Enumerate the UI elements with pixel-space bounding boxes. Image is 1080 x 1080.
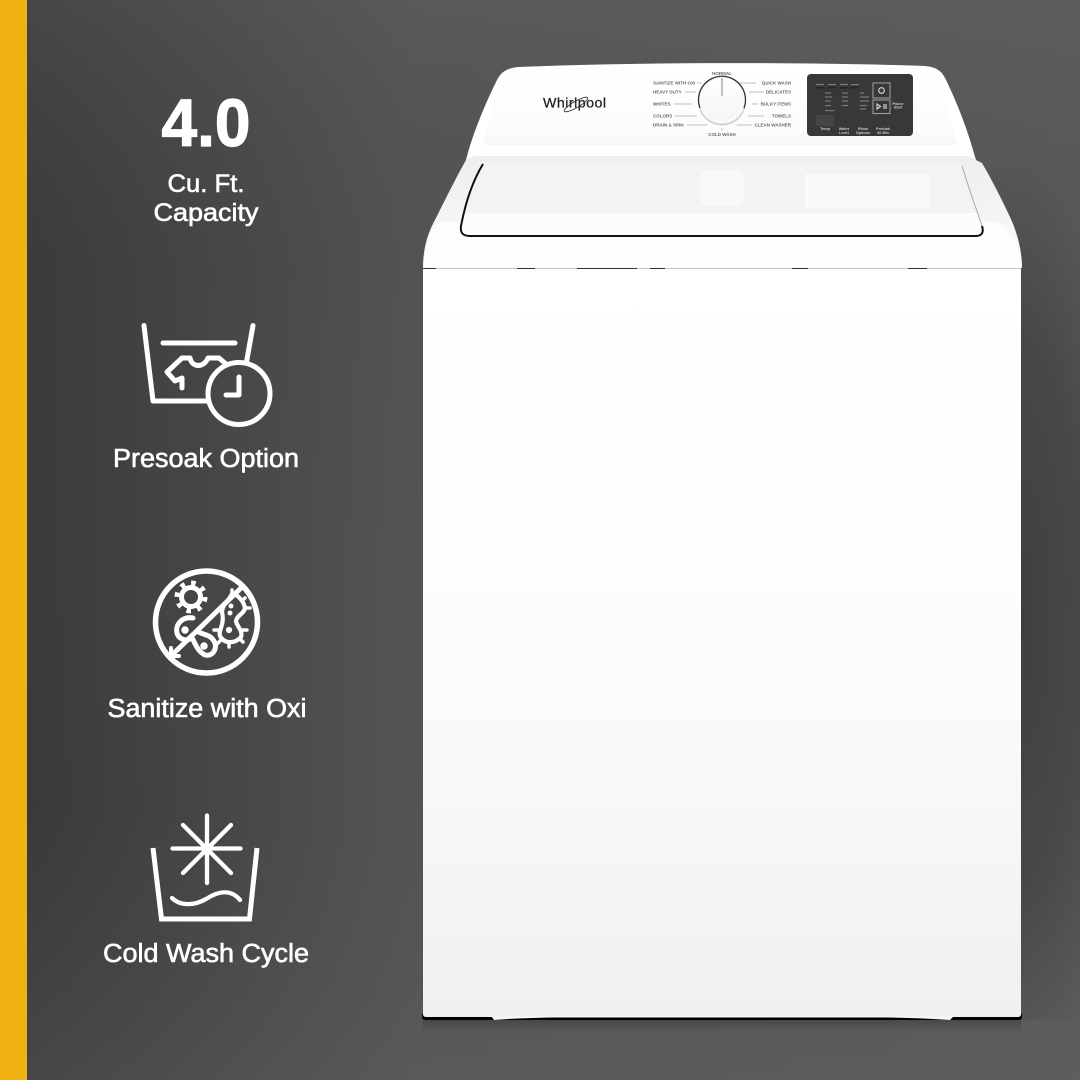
washer cabinet: [423, 268, 1021, 1017]
control panel: [807, 74, 913, 136]
console recessed face: [483, 66, 957, 145]
cycle labels: TOWELS: [772, 114, 791, 118]
panel labels: Pause: [892, 102, 904, 106]
floor shadow: [423, 1020, 1021, 1032]
panel labels: Options: [856, 131, 870, 135]
washer base edge: [422, 1012, 1022, 1020]
panel labels: Level: [839, 131, 849, 135]
panel labels: Prefoak: [876, 127, 891, 131]
sanitize label: Sanitize with Oxi: [108, 695, 306, 723]
lid front block: [424, 222, 1021, 268]
washer console: [466, 63, 976, 160]
cold wash label: Cold Wash Cycle: [103, 940, 309, 968]
brand logo: Whirlpool: [543, 96, 606, 112]
cycle labels: QUICK WASH: [762, 80, 791, 86]
washing machine: [422, 63, 1022, 1032]
icon: tub with shirt and clock: [144, 326, 270, 424]
washer shoulders: [423, 156, 1022, 268]
capacity label: Cu. Ft.: [168, 170, 244, 198]
panel labels: Rinse: [858, 127, 868, 131]
feature: cold wash cycle: [103, 816, 309, 968]
foot highlight: [491, 1016, 954, 1020]
cycle labels: CLEAN WASHER: [754, 122, 792, 128]
icon: crossed out germs: [156, 571, 258, 673]
cycle labels: BULKY ITEMS: [761, 102, 791, 106]
capacity label: Capacity: [154, 199, 259, 227]
panel labels: Start: [894, 106, 903, 110]
feature: capacity: [154, 86, 259, 227]
cycle labels: SANITIZE WITH OXI: [653, 80, 695, 86]
cycle labels: COLORS: [653, 114, 672, 118]
indicator lights: [816, 84, 869, 111]
cycle labels: DELICATES: [766, 90, 791, 94]
feature: presoak option: [113, 326, 299, 473]
selector dial: [698, 76, 746, 126]
cycle labels: HEAVY DUTY: [653, 90, 682, 94]
cycle labels: NORMAL: [712, 71, 732, 76]
panel labels: [820, 102, 904, 135]
icon: tub with snowflake: [153, 816, 257, 919]
feature: sanitize with oxi: [108, 571, 306, 723]
panel labels: Water: [839, 127, 850, 131]
capacity number: 4.0: [162, 86, 250, 161]
cycle labels: DRAIN & SPIN: [653, 122, 684, 128]
seam line: [423, 268, 1021, 270]
panel labels: 30 Min: [877, 131, 890, 135]
washer lid: [461, 163, 983, 236]
cycle labels: [653, 71, 792, 137]
capacity label: [154, 170, 259, 227]
panel labels: Temp: [820, 127, 831, 131]
presoak label: Presoak Option: [113, 445, 299, 473]
cycle labels: WHITES: [653, 102, 670, 106]
cycle labels: COLD WASH: [708, 132, 736, 137]
panel buttons: [873, 83, 890, 114]
yellow side bar: [0, 0, 27, 1080]
